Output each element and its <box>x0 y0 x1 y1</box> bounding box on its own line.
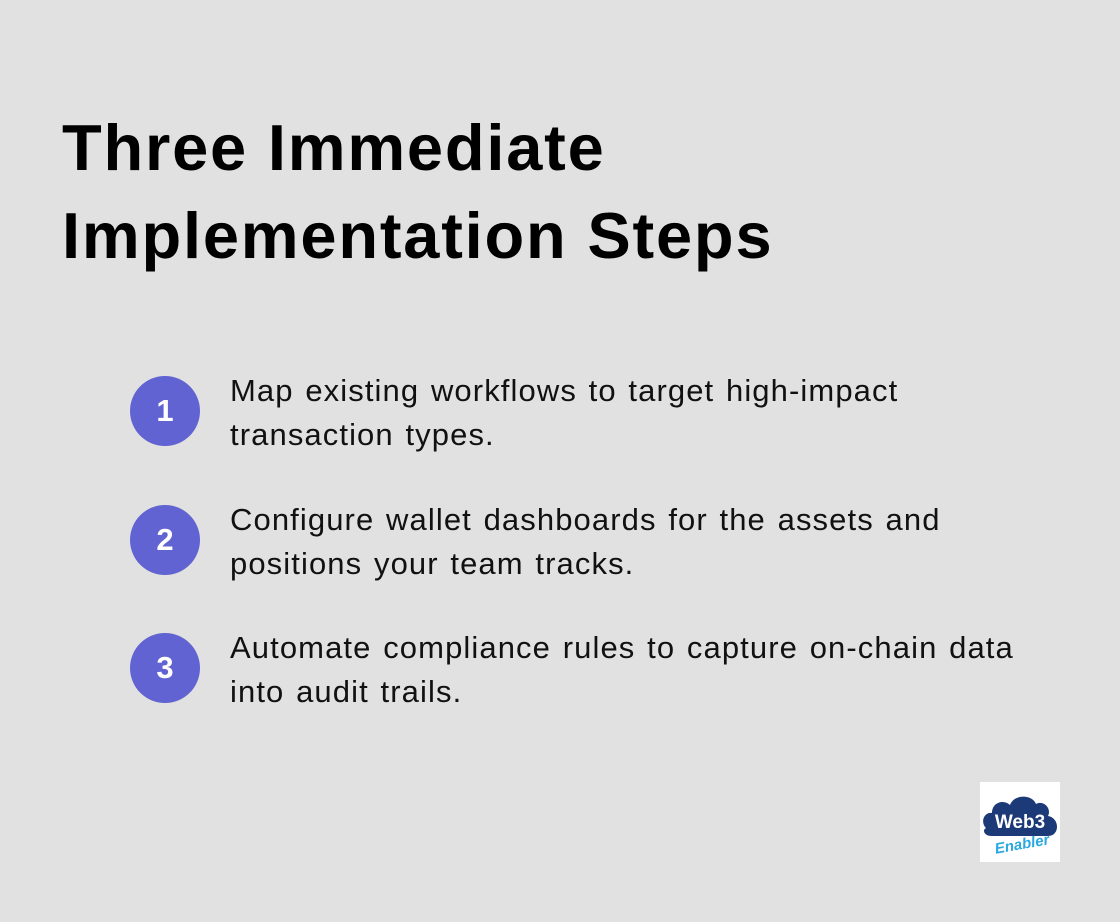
step 3 text <box>230 630 1014 709</box>
number badge 2: 2 <box>156 522 174 557</box>
number badge 3: 3 <box>156 650 174 685</box>
step 3 text: Automate compliance rules to capture on-chain data <box>230 630 1014 665</box>
step 1 text <box>230 373 898 452</box>
number badge 1: 1 <box>156 393 174 428</box>
step 2 text: Configure wallet dashboards for the assets and <box>230 502 941 537</box>
step 2 <box>130 502 941 581</box>
step 1 text: transaction types. <box>230 417 495 452</box>
step 3 text: into audit trails. <box>230 674 462 709</box>
logo: Web3 Enabler: Enabler <box>994 831 1052 858</box>
logo: Web3 Enabler: Web3 <box>995 812 1045 833</box>
title: Three Immediate <box>62 111 606 184</box>
step 2 text: positions your team tracks. <box>230 546 634 581</box>
step 1 <box>130 373 898 452</box>
number badge 1 <box>130 376 200 446</box>
logo: Web3 Enabler <box>980 782 1060 862</box>
number badge 3 <box>130 633 200 703</box>
number badge 2 <box>130 505 200 575</box>
step 2 text <box>230 502 941 581</box>
step 1 text: Map existing workflows to target high-impact <box>230 373 898 408</box>
title: Implementation Steps <box>62 199 773 272</box>
title <box>62 111 773 272</box>
step 3 <box>130 630 1014 709</box>
